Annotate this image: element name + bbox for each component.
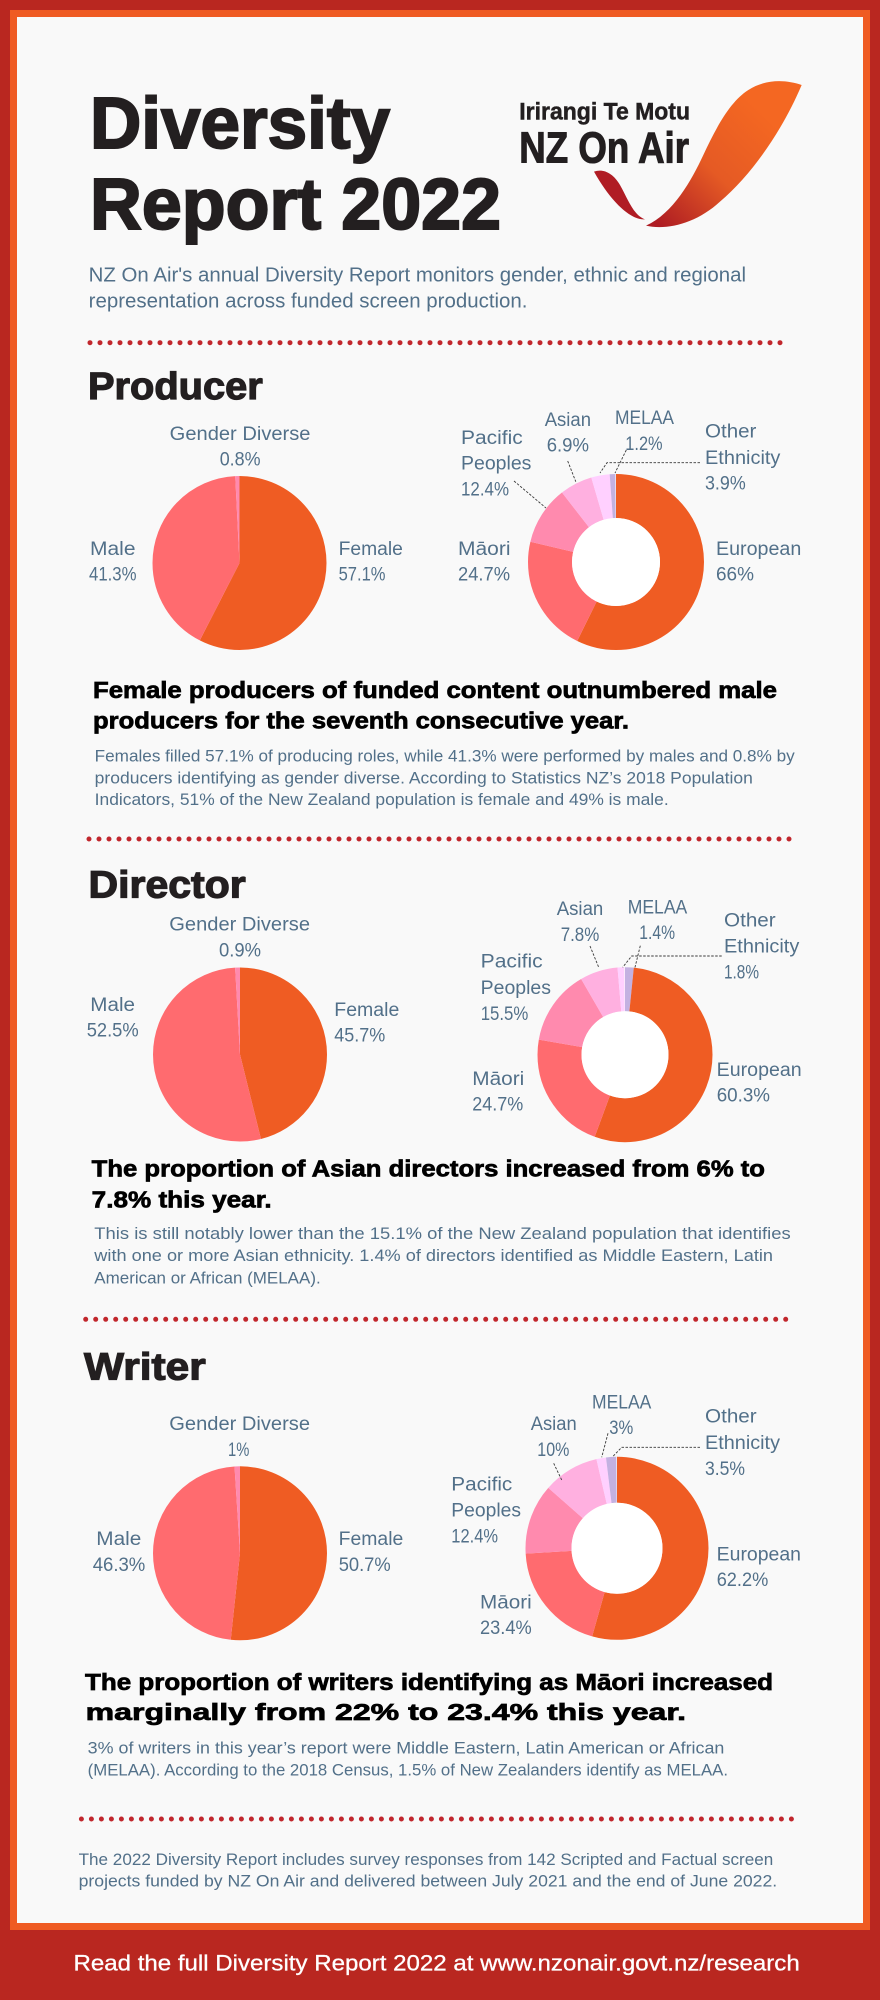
- footnote text: The 2022 Diversity Report includes survey responses from 142 Scripted and Factual screen: [79, 1851, 773, 1869]
- key finding: director: The proportion of Asian directors increased from 6% to: [92, 1156, 765, 1182]
- pie labels: director gender: Gender Diverse: [169, 915, 310, 936]
- body text: producer: [95, 748, 795, 809]
- key finding: director: 7.8% this year.: [92, 1186, 272, 1212]
- donut labels and leader lines: writer ethnicity: 3.5%: [705, 1459, 745, 1480]
- body text: writer: 3% of writers in this year’s report were Middle Eastern, Latin American or African: [88, 1739, 724, 1757]
- donut labels and leader lines: producer ethnicity: 1.2%: [625, 434, 663, 455]
- key finding: producer: Female producers of funded content outnumbered male: [93, 677, 777, 703]
- pie labels: writer gender: Gender Diverse: [169, 1414, 310, 1435]
- donut labels and leader lines: director ethnicity: MELAA: [628, 897, 688, 918]
- intro text: [89, 265, 746, 312]
- donut labels and leader lines: producer ethnicity: Asian: [545, 410, 591, 431]
- donut labels and leader lines: producer ethnicity: European: [716, 539, 801, 560]
- pie labels: writer gender: 46.3%: [93, 1555, 145, 1576]
- pie labels: writer gender: Male: [96, 1529, 141, 1550]
- pie labels: producer gender: Female: [339, 539, 403, 560]
- donut labels and leader lines: producer ethnicity: 24.7%: [458, 564, 510, 585]
- donut chart: producer ethnicity: [550, 496, 682, 628]
- donut labels and leader lines: writer ethnicity: 62.2%: [717, 1570, 768, 1591]
- donut labels and leader lines: producer ethnicity: MELAA: [615, 408, 674, 429]
- body text: producer: producers identifying as gender diverse. According to Statistics NZ’s 2018 Population: [95, 769, 753, 787]
- donut labels and leader lines: writer ethnicity: 12.4%: [451, 1527, 498, 1548]
- donut labels and leader lines: producer ethnicity: Ethnicity: [705, 448, 781, 469]
- donut labels and leader lines: writer ethnicity: Peoples: [451, 1501, 521, 1522]
- pie labels: producer gender: 0.8%: [220, 450, 261, 471]
- donut labels and leader lines: director ethnicity: 1.4%: [639, 923, 675, 944]
- donut labels and leader lines: producer ethnicity: Peoples: [461, 454, 531, 474]
- donut labels and leader lines: writer ethnicity: Pacific: [451, 1475, 512, 1496]
- pie chart: writer gender: [196, 1510, 284, 1597]
- body text: writer: [88, 1739, 728, 1779]
- donut labels and leader lines: producer ethnicity: 6.9%: [547, 436, 589, 457]
- heading: Producer: Producer: [88, 366, 263, 408]
- panel: producer: [88, 366, 801, 809]
- pie labels: director gender: Male: [90, 995, 135, 1016]
- pie labels: director gender: [87, 915, 399, 1047]
- donut labels and leader lines: director ethnicity: Peoples: [481, 978, 551, 999]
- pie labels: producer gender: [89, 424, 403, 585]
- call to action banner: Read the full Diversity Report 2022 at www.nzonair.govt.nz/research: [74, 1951, 800, 1976]
- pie labels: director gender: 0.9%: [219, 941, 261, 962]
- donut labels and leader lines: director ethnicity: 1.8%: [724, 963, 759, 984]
- body text: director: American or African (MELAA).: [94, 1269, 321, 1287]
- donut labels and leader lines: writer ethnicity: Māori: [480, 1592, 532, 1613]
- key finding: writer: [85, 1669, 773, 1725]
- logo: NZ On Air: Irirangi Te Motu: [519, 98, 690, 125]
- donut labels and leader lines: producer ethnicity: 3.9%: [705, 474, 746, 494]
- pie labels: producer gender: Gender Diverse: [170, 424, 310, 445]
- donut labels and leader lines: director ethnicity: [472, 897, 802, 1116]
- pie chart: producer gender: [196, 520, 283, 606]
- donut labels and leader lines: writer ethnicity: Other: [705, 1406, 757, 1427]
- body text: director: with one or more Asian ethnicity. 1.4% of directors identified as Middle Eastern, Latin: [93, 1247, 773, 1265]
- donut labels and leader lines: producer ethnicity: [458, 408, 801, 585]
- key finding: producer: [93, 677, 777, 733]
- donut labels and leader lines: writer ethnicity: MELAA: [592, 1392, 652, 1413]
- donut labels and leader lines: producer ethnicity: 66%: [716, 564, 754, 585]
- footnote text: [79, 1851, 777, 1891]
- donut labels and leader lines: producer ethnicity: Māori: [458, 539, 510, 560]
- donut labels and leader lines: director ethnicity: Māori: [472, 1069, 524, 1090]
- pie labels: director gender: Female: [334, 1000, 399, 1021]
- pie labels: writer gender: [93, 1414, 403, 1576]
- pie labels: writer gender: Female: [339, 1529, 403, 1550]
- key finding: producer: producers for the seventh consecutive year.: [93, 707, 629, 733]
- heading: Writer: Writer: [84, 1346, 206, 1388]
- logo: NZ On Air: NZ On Air: [519, 124, 689, 173]
- donut labels and leader lines: writer ethnicity: 10%: [537, 1440, 569, 1461]
- logo: NZ On Air: [519, 81, 802, 227]
- donut labels and leader lines: writer ethnicity: 3%: [609, 1418, 633, 1439]
- donut labels and leader lines: director ethnicity: 7.8%: [561, 925, 599, 946]
- donut labels and leader lines: director ethnicity: Asian: [557, 899, 603, 920]
- pie labels: producer gender: Male: [90, 539, 136, 560]
- donut labels and leader lines: writer ethnicity: Asian: [531, 1414, 577, 1435]
- pie chart: director gender: [196, 1011, 284, 1098]
- key finding: director: [92, 1156, 765, 1212]
- donut labels and leader lines: director ethnicity: 15.5%: [481, 1004, 528, 1025]
- donut labels and leader lines: producer ethnicity: 12.4%: [461, 480, 509, 501]
- donut labels and leader lines: director ethnicity: Other: [724, 911, 776, 932]
- donut labels and leader lines: director ethnicity: Ethnicity: [724, 937, 800, 958]
- body text: producer: Indicators, 51% of the New Zealand population is female and 49% is male.: [95, 791, 669, 809]
- pie labels: writer gender: 50.7%: [339, 1555, 391, 1576]
- body text: director: This is still notably lower than the 15.1% of the New Zealand population that identifies: [94, 1225, 791, 1243]
- donut labels and leader lines: writer ethnicity: Ethnicity: [705, 1433, 781, 1454]
- donut chart: director ethnicity: [560, 989, 690, 1120]
- pie labels: director gender: 45.7%: [334, 1026, 385, 1047]
- footnote text: projects funded by NZ On Air and delivered between July 2021 and the end of June 2022.: [79, 1873, 777, 1891]
- donut labels and leader lines: writer ethnicity: European: [717, 1545, 801, 1566]
- heading: Director: Director: [88, 864, 246, 906]
- title: Report 2022: [90, 165, 501, 245]
- intro text: representation across funded screen production.: [89, 290, 527, 312]
- donut labels and leader lines: writer ethnicity: [451, 1392, 801, 1639]
- body text: writer: (MELAA). According to the 2018 Census, 1.5% of New Zealanders identify as MELAA.: [88, 1761, 728, 1779]
- donut labels and leader lines: director ethnicity: Pacific: [481, 952, 543, 973]
- pie labels: writer gender: 1%: [228, 1440, 249, 1461]
- donut chart: writer ethnicity: [548, 1480, 686, 1617]
- title: [90, 84, 501, 245]
- donut labels and leader lines: writer ethnicity: 23.4%: [480, 1618, 532, 1639]
- donut labels and leader lines: producer ethnicity: Pacific: [461, 428, 523, 449]
- panel: writer: [84, 1346, 801, 1779]
- body text: director: [93, 1225, 791, 1287]
- key finding: writer: The proportion of writers identifying as Māori increased: [85, 1669, 773, 1695]
- panel: director: [87, 864, 802, 1287]
- pie labels: producer gender: 41.3%: [89, 564, 137, 585]
- key finding: writer: marginally from 22% to 23.4% this year.: [86, 1699, 686, 1725]
- donut labels and leader lines: director ethnicity: 60.3%: [717, 1086, 770, 1107]
- donut labels and leader lines: director ethnicity: 24.7%: [472, 1095, 523, 1116]
- pie labels: director gender: 52.5%: [87, 1021, 139, 1042]
- intro text: NZ On Air's annual Diversity Report monitors gender, ethnic and regional: [89, 265, 746, 287]
- body text: producer: Females filled 57.1% of producing roles, while 41.3% were performed by males and 0.8% by: [95, 748, 795, 766]
- pie labels: producer gender: 57.1%: [339, 564, 386, 585]
- donut labels and leader lines: producer ethnicity: Other: [705, 422, 757, 443]
- title: Diversity: [90, 84, 390, 164]
- donut labels and leader lines: director ethnicity: European: [717, 1060, 802, 1081]
